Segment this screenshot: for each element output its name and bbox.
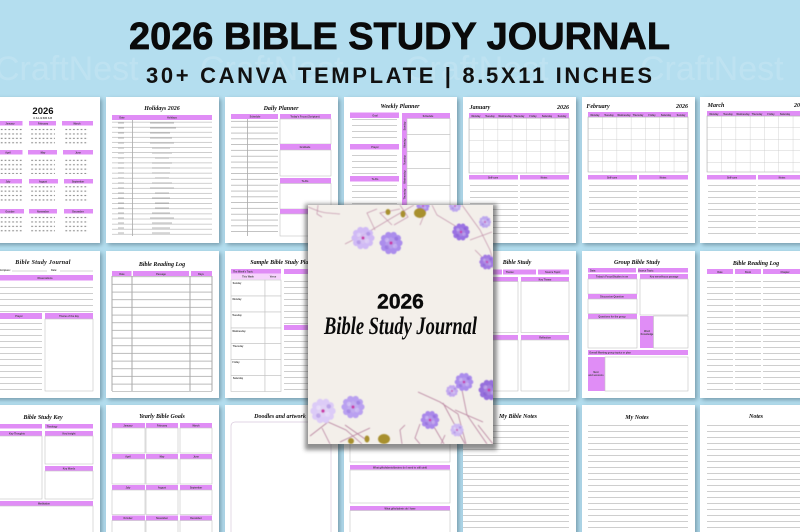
page: calendar: 2026	[32, 106, 54, 117]
page: march: Friday	[767, 113, 775, 116]
page: group bible study: Discussion Question	[600, 296, 624, 298]
page: march: March	[707, 103, 725, 109]
page: group bible study: Word	[644, 330, 651, 333]
page: bible study: Key Theme	[539, 278, 552, 282]
subtitle: 30+ CANVA TEMPLATE | 8.5X11 INCHES	[146, 63, 652, 88]
page: calendar: June	[75, 152, 81, 154]
page: january: Tuesday	[485, 115, 495, 118]
page: january: Sunday	[558, 115, 567, 118]
page: calendar: March	[73, 122, 81, 126]
page: march: Self-care	[727, 176, 738, 180]
page: january: Thursday	[514, 115, 525, 118]
page: february	[582, 97, 695, 243]
page: yearly bible goals: August	[158, 486, 166, 490]
page: january: Friday	[529, 115, 537, 118]
page: february: 2026	[675, 104, 688, 110]
page: sample bible study plan	[225, 251, 338, 398]
page: reflections: What gifts/talents/desires do I need to still yield	[373, 466, 428, 470]
page: january: Monday	[471, 115, 481, 118]
page: calendar: CALENDAR	[33, 116, 53, 120]
page: sample bible study plan: Verse	[270, 276, 277, 278]
page: sample bible study plan: Sample Bible Study Plan	[250, 260, 312, 266]
page: daily planner: Daily Planner	[263, 106, 299, 112]
page: group bible study: Group Bible Study	[614, 260, 660, 266]
page: sample bible study plan: Friday	[232, 361, 240, 364]
page: bible reading log 2	[700, 251, 800, 398]
page: yearly bible goals: October	[123, 517, 133, 520]
page: yearly bible goals: September	[190, 486, 202, 490]
page: february: February	[586, 104, 610, 110]
page: holidays: Holidays	[167, 116, 178, 120]
page: bible reading log: Passage	[156, 273, 167, 276]
page: group bible study: Source Topic:	[638, 270, 654, 272]
page: calendar: February	[38, 122, 49, 126]
page: bible study journal: Observations	[37, 277, 53, 280]
page: daily planner: Today's Focus (Scripture)	[290, 116, 320, 118]
page: yearly bible goals: November	[156, 517, 168, 520]
page: weekly planner: Weekly Planner	[380, 104, 420, 110]
page: reflections	[344, 405, 457, 532]
page: february: Self-care	[607, 176, 618, 180]
page: sample bible study plan: Wednesday	[232, 330, 246, 333]
page: bible reading log: Days	[198, 273, 205, 276]
page: calendar: August	[39, 180, 47, 184]
page: sample bible study plan: Saturday	[233, 377, 244, 380]
page: yearly bible goals	[106, 405, 219, 532]
page: calendar: April	[5, 152, 11, 154]
page: my notes	[582, 405, 695, 532]
page: yearly bible goals: April	[125, 456, 131, 458]
page: bible reading log	[106, 251, 219, 398]
page: sample bible study plan: The Week's Topic	[233, 270, 254, 274]
page: daily planner: To-Do	[302, 180, 309, 183]
page: january: Saturday	[542, 115, 553, 118]
page: bible study: Theme:	[506, 271, 514, 274]
page: weekly planner: Schedule	[423, 115, 434, 118]
page: bible reading log: Bible Reading Log	[138, 262, 185, 268]
page: weekly planner: To-Do	[372, 178, 379, 181]
page: group bible study: and sessions	[588, 374, 604, 377]
watermark: CraftNest	[405, 50, 549, 88]
cover florals	[308, 200, 499, 444]
page: bible study journal: Bible Study Journal	[14, 260, 71, 266]
page: march: Wednesday	[736, 113, 750, 116]
page: bible study: Reflection	[539, 336, 551, 340]
page: february: Notes	[660, 176, 667, 180]
page: march: Tuesday	[723, 113, 733, 116]
page: group bible study: Date:	[590, 270, 596, 272]
page: bible reading log: Date	[119, 273, 125, 276]
page: bible reading log 2: Chapter	[780, 271, 790, 274]
page: daily planner: Gratitude	[300, 146, 311, 149]
page: bible reading log 2: Bible Reading Log	[732, 261, 779, 267]
page: calendar: October	[5, 210, 15, 214]
page: february: Sunday	[677, 114, 686, 117]
page: january: Self-care	[488, 176, 499, 180]
page: bible study journal: Theme of the day	[59, 315, 79, 318]
title: 2026 BIBLE STUDY JOURNAL	[129, 16, 670, 58]
page: bible study key: Key Thoughts	[9, 432, 26, 436]
page: february: Wednesday	[617, 114, 631, 117]
page: group bible study: Questions for the group	[598, 316, 626, 318]
page: yearly bible goals: December	[190, 517, 202, 520]
page: bible study key	[0, 405, 100, 532]
page: march: Saturday	[780, 113, 791, 116]
page: weekly planner: Monday	[404, 138, 406, 148]
page: holidays: Holidays 2026	[143, 106, 180, 112]
page: sample bible study plan: Thursday	[233, 345, 244, 348]
page: group bible study: Knowledge	[641, 333, 654, 336]
page: bible study key: Bible Study Key	[22, 415, 63, 421]
page: doodles and artwork: Doodles and artwork	[253, 414, 306, 420]
page: bible study key: Theology	[47, 426, 58, 428]
page: bible study key: Meditation	[38, 502, 51, 506]
page: weekly planner: Tuesday	[404, 155, 406, 165]
page: weekly planner: Sunday	[404, 121, 406, 130]
page: group bible study: Key verse/focus passage	[650, 276, 679, 278]
page: calendar	[0, 97, 100, 243]
cover year: 2026	[377, 290, 424, 314]
page: holidays	[106, 97, 219, 243]
page: january: January	[469, 105, 491, 111]
page: yearly bible goals: June	[193, 456, 199, 458]
page: weekly planner	[344, 97, 457, 243]
page: yearly bible goals: January	[123, 424, 133, 428]
page: my bible notes: My Bible Notes	[498, 414, 538, 420]
page: weekly planner: Prayer	[371, 146, 379, 149]
page: sample bible study plan: Tuesday	[232, 314, 242, 317]
page: group bible study: Next	[593, 371, 599, 374]
page: bible reading log 2: Date	[717, 271, 723, 274]
page: bible study journal: Prayer	[15, 315, 23, 318]
page: january: 2026	[556, 105, 569, 111]
page: bible study	[463, 251, 576, 398]
page: group bible study: Overall Meeting group topics or plan	[589, 352, 631, 354]
page: january	[463, 97, 576, 243]
page: notes: Notes	[748, 414, 764, 420]
page: bible study: Bible Study	[502, 260, 532, 266]
page: calendar: May	[41, 152, 46, 154]
page: january: Wednesday	[498, 115, 512, 118]
page: daily planner: Schedule	[250, 116, 261, 118]
page: bible study journal: Date:	[51, 269, 57, 272]
page: february: Saturday	[661, 114, 672, 117]
page: bible study: Source Topic:	[545, 271, 561, 274]
page: my bible notes	[463, 405, 576, 532]
page: yearly bible goals: Yearly Bible Goals	[139, 414, 185, 420]
page: calendar: July	[6, 180, 11, 184]
page: weekly planner: Wednesday	[404, 170, 406, 184]
page: yearly bible goals: March	[192, 424, 200, 428]
watermark	[0, 50, 784, 88]
page: group bible study: Today's Focus/Studies in on	[596, 276, 629, 278]
page: bible study key: Key Insight	[63, 432, 76, 436]
page: march: Notes	[779, 176, 786, 180]
page: calendar: November	[37, 210, 49, 214]
page: february: Monday	[590, 114, 600, 117]
page: bible study key: Key Words	[63, 468, 76, 470]
page: calendar: September	[72, 180, 84, 184]
page: reflections: What gifts/talents do I have	[385, 508, 416, 510]
page: calendar: December	[72, 210, 84, 214]
page: yearly bible goals: July	[126, 486, 131, 490]
page: sample bible study plan: This Week	[242, 276, 255, 278]
page: doodles and artwork	[225, 405, 338, 532]
cover shadow	[305, 204, 497, 450]
page: february: Tuesday	[604, 114, 614, 117]
page: march	[700, 97, 800, 243]
page: calendar: January	[5, 122, 15, 126]
page: march: Monday	[709, 113, 719, 116]
page: daily planner	[225, 97, 338, 243]
page: group bible study	[582, 251, 695, 398]
cover	[308, 200, 499, 444]
watermark: CraftNest	[200, 50, 344, 88]
page: february: Friday	[648, 114, 656, 117]
page: holidays: Date	[119, 116, 125, 120]
page: sample bible study plan: Monday	[232, 298, 242, 301]
page: notes	[700, 405, 800, 532]
page: march: Thursday	[752, 113, 763, 116]
page: my notes: My Notes	[624, 415, 649, 421]
page: weekly planner: Goal	[372, 114, 378, 118]
page: bible study journal	[0, 251, 100, 398]
watermark: CraftNest	[640, 50, 784, 88]
page: weekly planner: Thursday	[404, 188, 406, 199]
cover script title: Bible Study Journal	[323, 313, 477, 340]
page: yearly bible goals: February	[157, 424, 168, 428]
page: yearly bible goals: May	[160, 456, 165, 458]
page: sample bible study plan: Sunday	[233, 282, 242, 285]
page: bible reading log 2: Book	[745, 271, 752, 274]
page: february: Thursday	[633, 114, 644, 117]
page: january: Notes	[541, 176, 548, 180]
